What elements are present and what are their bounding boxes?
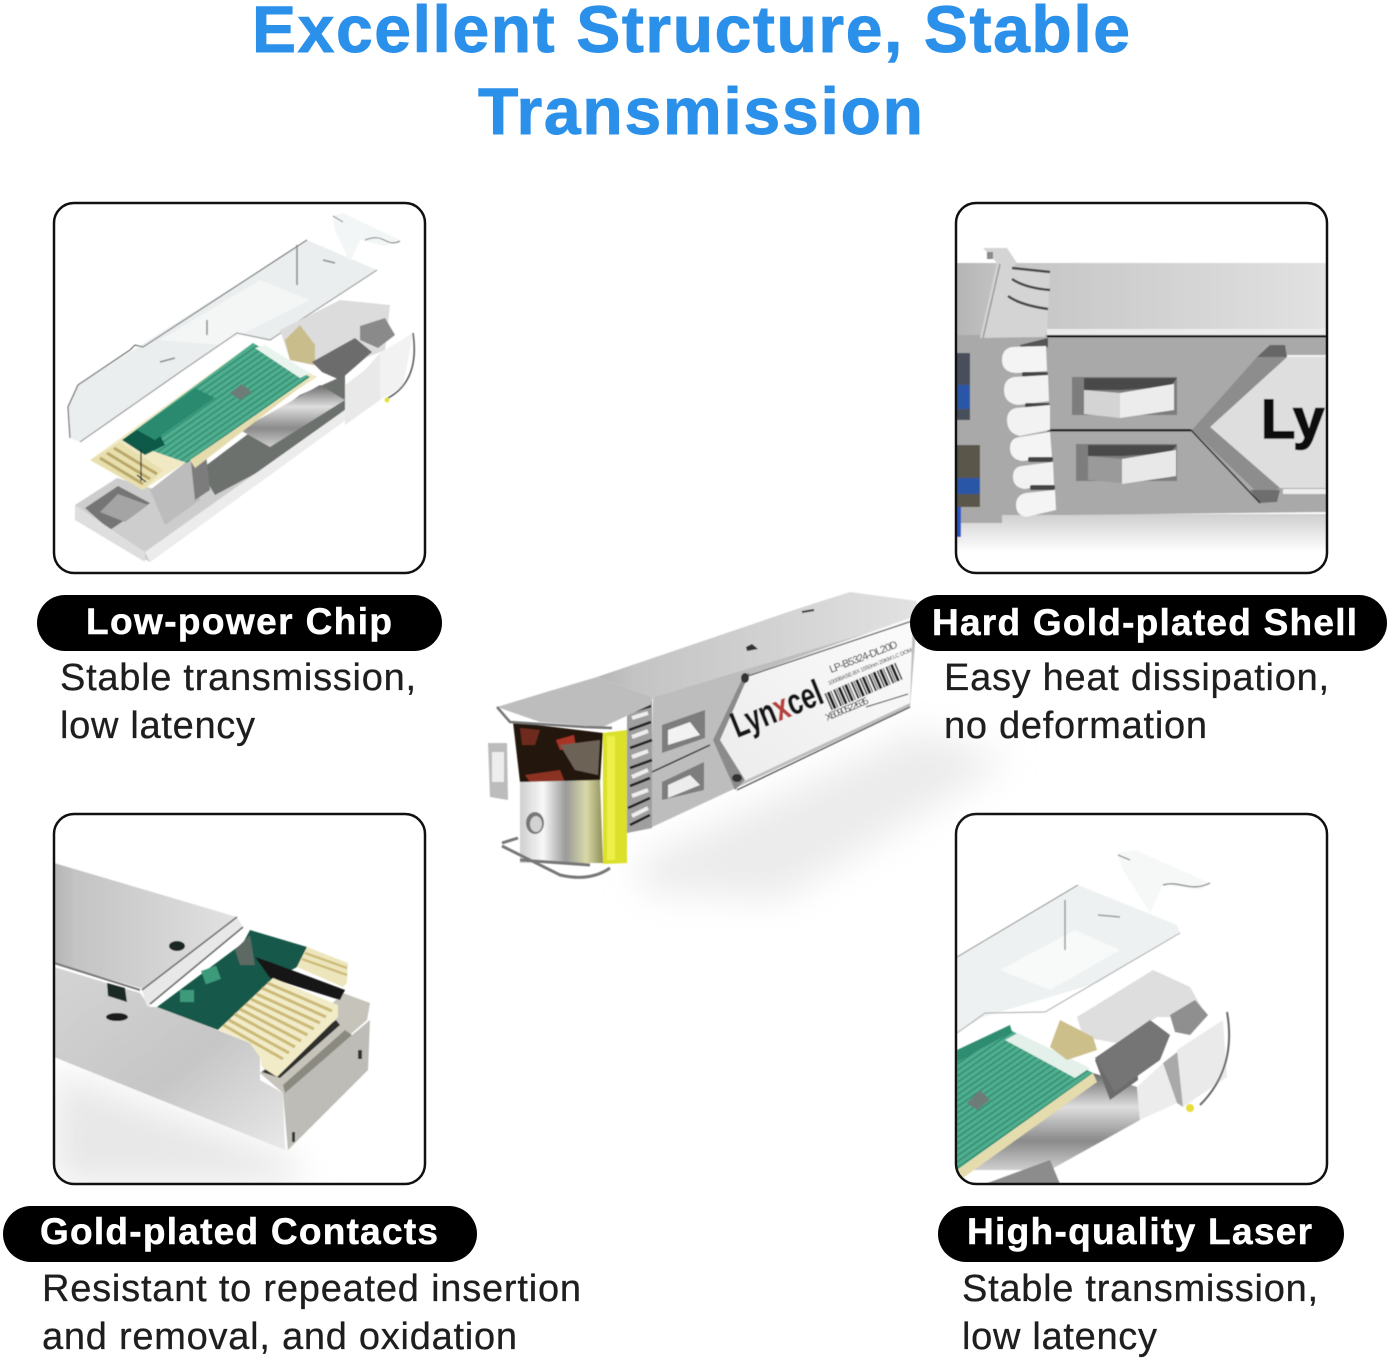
upper slot — [1072, 377, 1177, 418]
badge: low-power chip: Low-power Chip — [86, 601, 392, 642]
shell top — [54, 863, 237, 990]
rim line — [1047, 329, 1327, 432]
soft shadow — [640, 730, 1010, 900]
circuit board — [90, 343, 317, 490]
badge: gold-plated contacts: Gold-plated Contacts — [40, 1211, 438, 1252]
text: shell description — [944, 657, 1329, 747]
badge: high-quality laser: High-quality Laser — [967, 1211, 1312, 1252]
holes — [106, 941, 362, 1142]
panel: hard gold-plated shell image — [956, 203, 1327, 573]
model number: LP-B5324-DL20D — [828, 639, 900, 676]
text: shell description: no deformation — [944, 705, 1207, 747]
top face notches — [746, 610, 814, 651]
upper gold contacts — [297, 947, 348, 987]
yellow tube — [603, 730, 627, 864]
title — [252, 0, 1130, 148]
panel: high-quality laser image — [956, 814, 1327, 1184]
brand logo: Lynxcel — [725, 672, 829, 745]
shell tray base — [74, 375, 346, 562]
shell side face — [957, 335, 1327, 523]
lower gold contacts — [218, 978, 338, 1077]
green board — [157, 930, 307, 1030]
floor shadow — [56, 1074, 295, 1182]
optics window — [956, 353, 980, 537]
underline — [866, 694, 908, 707]
bail wire top — [497, 707, 612, 728]
barcode — [828, 671, 899, 702]
spring clips — [627, 697, 652, 833]
grounding fingers — [1002, 338, 1056, 517]
side tab — [488, 743, 508, 800]
lower slot — [1076, 444, 1177, 484]
board parts — [180, 935, 345, 1002]
spring tab — [980, 248, 1050, 338]
white label — [713, 617, 913, 783]
bail wire bottom — [502, 838, 610, 877]
screw hole — [526, 812, 544, 834]
product photo: SFP transceiver — [488, 592, 1010, 900]
badge: high-quality laser — [938, 1206, 1344, 1262]
title: Transmission — [478, 74, 923, 148]
shell top face — [957, 263, 1327, 337]
slots — [652, 710, 710, 800]
text: low-power chip description: Stable transmission, — [60, 657, 416, 699]
text: contacts description: and removal, and oxidation — [42, 1316, 517, 1358]
spec line: 1000BASE-BX 1550nm 20KM LC DOM — [828, 647, 913, 687]
badge: low-power chip — [37, 595, 442, 651]
badge: hard gold-plated shell — [910, 595, 1387, 651]
module side face — [650, 618, 917, 828]
text: low-power chip description: low latency — [60, 705, 255, 747]
text: laser description: Stable transmission, — [962, 1268, 1318, 1310]
badge: hard gold-plated shell: Hard Gold-plated Shell — [932, 602, 1357, 643]
metal tube housing — [974, 1059, 1140, 1183]
transparent lid — [957, 850, 1210, 1033]
text: low-power chip description — [60, 657, 416, 747]
shell end — [283, 1020, 370, 1150]
shell side — [54, 967, 285, 1150]
text: laser description: low latency — [962, 1316, 1157, 1358]
label area — [1191, 345, 1327, 503]
text: contacts description — [42, 1268, 581, 1358]
panel: gold-plated contacts image — [54, 814, 425, 1184]
end block and wire — [1137, 1012, 1229, 1120]
floor shadow — [957, 514, 1326, 546]
front cavity — [513, 722, 603, 782]
module top face — [597, 592, 917, 697]
text: laser description — [962, 1268, 1318, 1358]
text: shell description: Easy heat dissipation, — [944, 657, 1329, 699]
label lettering: Ly — [1261, 387, 1324, 450]
panel: low-power chip image — [54, 203, 425, 573]
rim — [54, 917, 243, 1007]
front top plate — [497, 677, 653, 727]
connector mechanism — [1050, 970, 1208, 1092]
connector and latch — [280, 300, 414, 425]
serial number: X6090522635 — [824, 695, 871, 724]
transparent lid — [68, 213, 400, 442]
badge: gold-plated contacts — [3, 1206, 477, 1262]
circuit board — [957, 1025, 1097, 1180]
text: contacts description: Resistant to repeated insertion — [42, 1268, 581, 1310]
label chevron — [713, 620, 915, 790]
tray — [260, 993, 370, 1093]
front body — [520, 780, 603, 863]
